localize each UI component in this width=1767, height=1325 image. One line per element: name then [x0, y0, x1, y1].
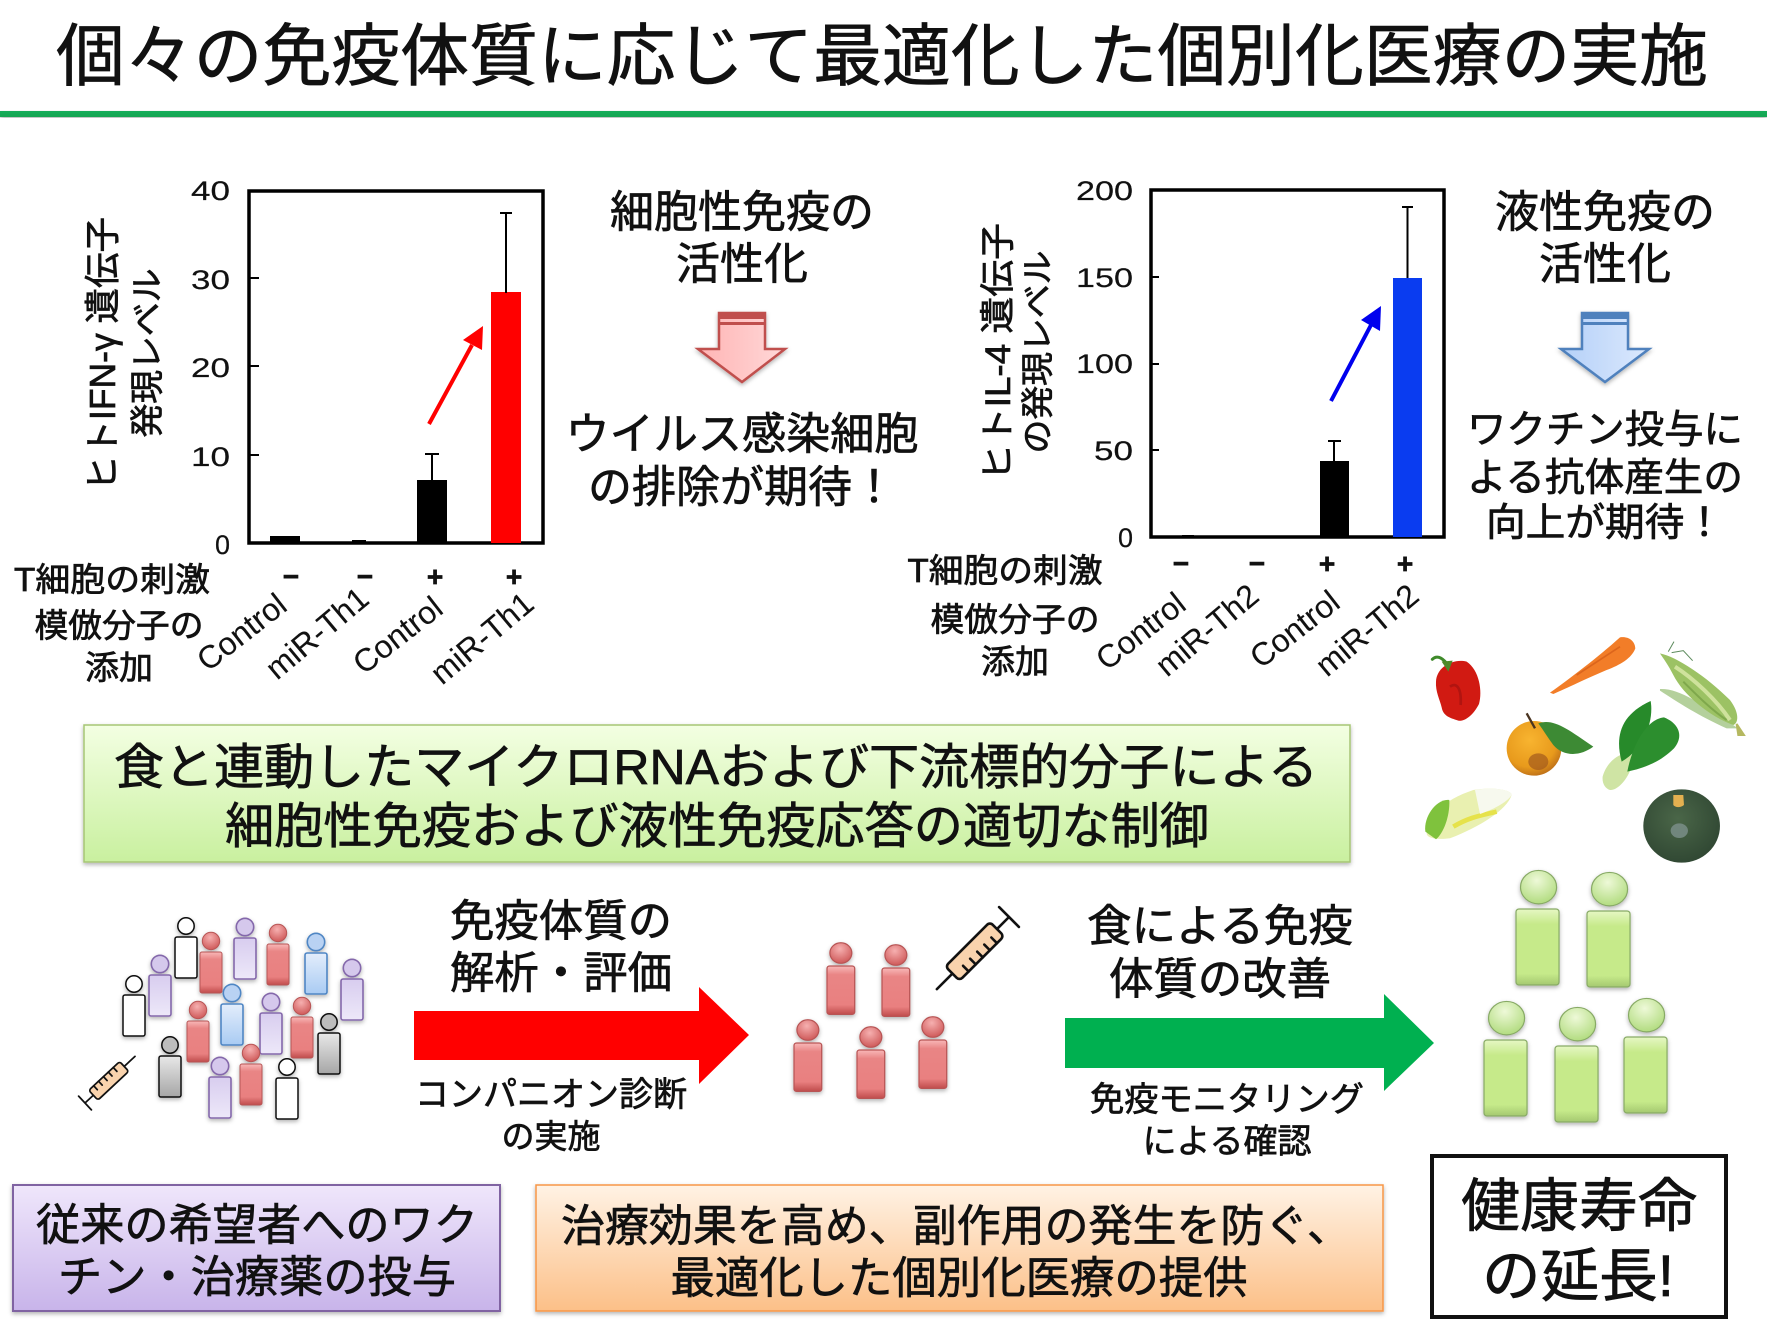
y axis tick labels: 100 [1076, 349, 1133, 379]
heading [610, 188, 874, 289]
T cell stimulation row: − [1173, 548, 1189, 579]
conventional text [36, 1201, 478, 1302]
personalized text [561, 1202, 1351, 1303]
heading: 液性免疫の [1495, 188, 1715, 237]
chart frame and bars [1151, 190, 1444, 537]
lifespan text [1461, 1174, 1697, 1309]
label: improvement by diet: 体質の改善 [1109, 955, 1331, 1004]
icon: carrot [1550, 637, 1635, 694]
label: improvement by diet: 食による免疫 [1087, 902, 1353, 951]
expected outcome: よる抗体産生の [1467, 457, 1743, 500]
T cell stimulation row: − [1249, 548, 1265, 579]
heading: 細胞性免疫の [610, 188, 874, 237]
label: immune monitoring: 免疫モニタリング [1090, 1081, 1364, 1119]
y axis tick labels: 10 [191, 442, 230, 472]
panel: healthy lifespan [1432, 1156, 1726, 1317]
expected outcome: 向上が期待！ [1486, 502, 1724, 545]
mimic molecule row [930, 577, 1425, 683]
panel: selected group [794, 943, 947, 1098]
icon: bok choy [1603, 701, 1679, 790]
panel: IFN-gamma bar chart [14, 176, 543, 691]
panel: healthy group [1484, 870, 1667, 1122]
T cell stimulation row: + [1397, 548, 1413, 579]
personalized text: 治療効果を高め、副作用の発生を防ぐ、 [561, 1202, 1351, 1251]
y axis tick labels: 200 [1076, 176, 1133, 206]
y axis tick labels: 150 [1076, 263, 1133, 293]
mimic molecule row: Control [1243, 583, 1346, 675]
y axis tick labels: 0 [215, 530, 230, 560]
y axis title: ヒトIFN-γ 遺伝子 [82, 217, 123, 491]
mimic molecule row: 添加 [981, 643, 1049, 680]
heading [1495, 188, 1715, 289]
y axis tick labels: 20 [191, 353, 230, 383]
y axis title: ヒトIL-4 遺伝子 [979, 223, 1018, 481]
icon: red pepper [1432, 657, 1480, 721]
heading: 活性化 [676, 240, 808, 289]
heading: 活性化 [1539, 240, 1671, 289]
label: immune analysis: 免疫体質の [450, 897, 672, 946]
T cell stimulation row: + [1319, 548, 1335, 579]
expected outcome: の排除が期待！ [588, 463, 896, 512]
mimic molecule row: 模倣分子の [34, 607, 204, 644]
personalized text: 最適化した個別化医療の提供 [670, 1254, 1248, 1303]
mimic molecule row: miR-Th2 [1308, 577, 1425, 683]
expected outcome: ワクチン投与に [1467, 409, 1743, 452]
mimic molecule row: Control [190, 586, 293, 678]
mimic molecule row: miR-Th2 [1148, 577, 1265, 683]
arrow: red increase [429, 326, 483, 424]
arrow: blue increase [1331, 306, 1381, 401]
T cell stimulation row [14, 561, 522, 598]
label: immune monitoring: による確認 [1143, 1123, 1311, 1161]
mimic molecule row: miR-Th1 [258, 580, 375, 686]
icon: corn [1660, 642, 1744, 735]
T cell stimulation row: + [506, 561, 522, 592]
icon: red down arrow [698, 313, 785, 382]
label: companion diagnostics: の実施 [502, 1118, 600, 1155]
T cell stimulation row: T細胞の刺激 [908, 552, 1102, 589]
label: immune analysis: 解析・評価 [450, 949, 672, 998]
banner text [114, 741, 1318, 854]
y axis tick labels: 50 [1094, 436, 1133, 466]
title: 個々の免疫体質に応じて最適化した個別化医療の実施 [56, 19, 1708, 95]
T cell stimulation row: − [283, 561, 299, 592]
T cell stimulation row: + [427, 561, 443, 592]
icon: syringe right [927, 907, 1019, 999]
panel: recommendation banner [84, 725, 1350, 862]
mimic molecule row: 模倣分子の [930, 601, 1100, 638]
mimic molecule row: Control [346, 589, 449, 681]
expected outcome: ウイルス感染細胞 [566, 410, 918, 459]
y axis title: の発現レベル [1019, 250, 1056, 454]
T cell stimulation row [908, 548, 1413, 589]
icon: syringe left [79, 1050, 141, 1110]
lifespan text: の延長! [1482, 1244, 1674, 1309]
icon: kabocha squash [1643, 789, 1720, 863]
arrow: red right [414, 987, 749, 1084]
y axis tick labels: 0 [1118, 523, 1133, 553]
banner text: 細胞性免疫および液性免疫応答の適切な制御 [225, 800, 1209, 854]
panel: conventional treatment [13, 1185, 500, 1311]
label: immune monitoring [1090, 1081, 1364, 1161]
panel: IL-4 bar chart [908, 176, 1444, 683]
icon: blue down arrow [1561, 313, 1649, 382]
banner text: 食と連動したマイクロRNAおよび下流標的分子による [114, 741, 1318, 795]
mimic molecule row: 添加 [85, 649, 153, 686]
icon: orange fruit [1507, 713, 1593, 776]
panel: vegetables [1425, 637, 1744, 863]
panel: diverse population [123, 918, 363, 1119]
conventional text: 従来の希望者へのワク [36, 1201, 478, 1250]
T cell stimulation row: T細胞の刺激 [14, 561, 210, 598]
expected outcome [1467, 409, 1743, 545]
mimic molecule row: miR-Th1 [423, 585, 540, 691]
label: improvement by diet [1087, 902, 1353, 1004]
panel: humoral immunity text [1467, 188, 1743, 545]
mimic molecule row: Control [1089, 585, 1192, 677]
chart frame and bars [249, 191, 543, 543]
arrow: green right [1065, 994, 1434, 1091]
y axis tick labels: 30 [191, 265, 230, 295]
label: companion diagnostics [415, 1076, 687, 1155]
y axis tick labels [1076, 176, 1133, 553]
conventional text: チン・治療薬の投与 [58, 1253, 456, 1302]
T cell stimulation row: − [357, 561, 373, 592]
label: companion diagnostics: コンパニオン診断 [415, 1076, 687, 1114]
icon: napa cabbage [1425, 789, 1512, 839]
panel: personalized medicine [536, 1185, 1383, 1311]
expected outcome [566, 410, 918, 512]
y axis tick labels: 40 [191, 176, 230, 206]
y axis title [979, 223, 1056, 481]
y axis title [82, 217, 167, 491]
lifespan text: 健康寿命 [1461, 1174, 1697, 1239]
y axis tick labels [191, 176, 230, 560]
panel: cell-mediated immunity text [566, 188, 918, 512]
label: immune analysis [450, 897, 672, 998]
y axis title: 発現レベル [129, 268, 167, 438]
mimic molecule row [34, 580, 540, 691]
